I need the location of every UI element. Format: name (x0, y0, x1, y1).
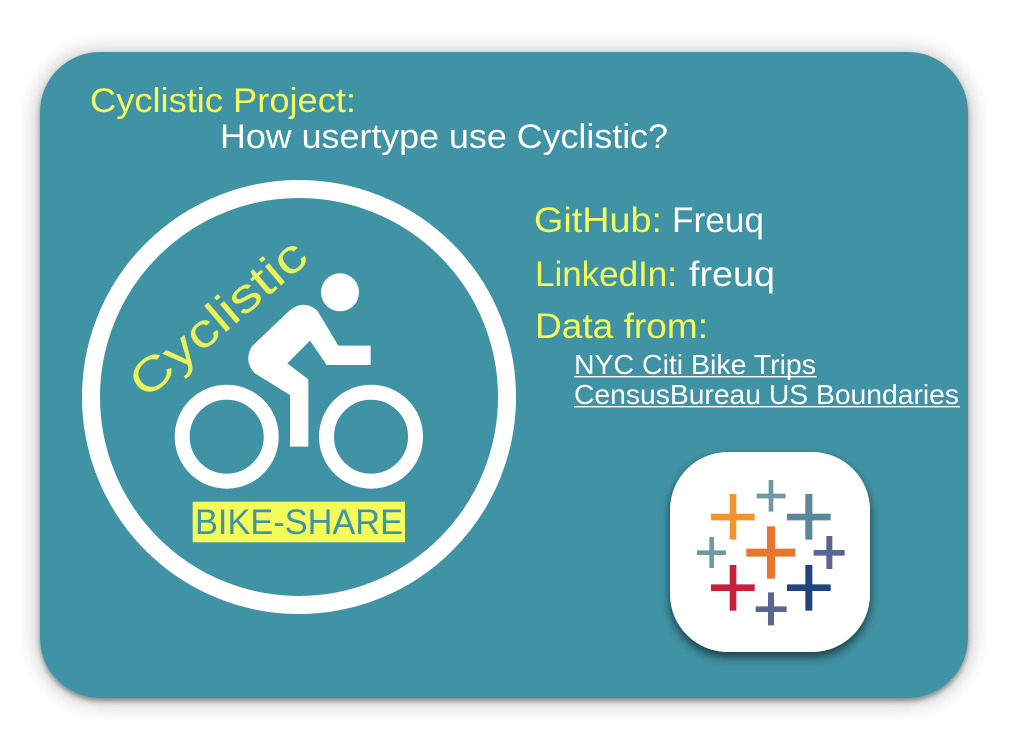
logo: Cyclistic bike-share (82, 180, 516, 614)
GitHub line: Freuq (672, 201, 764, 240)
heading: Cyclistic Project: Cyclistic Project: (90, 82, 356, 120)
title (90, 82, 668, 156)
LinkedIn line (535, 255, 775, 294)
logo wordmark: Cyclistic: Cyclistic (133, 246, 306, 392)
GitHub line (534, 201, 764, 240)
subtitle: How usertype use Cyclistic: How usertype use Cyclistic? (220, 118, 668, 156)
icon: cyclist (182, 273, 416, 481)
data source: NYC Citi Bike Trips: NYC Citi Bike Trips (574, 349, 816, 380)
LinkedIn line: freuq (689, 255, 775, 294)
GitHub line: GitHub: (534, 201, 662, 240)
text block: links and data sources (534, 201, 960, 410)
Data from heading: Data from: (535, 307, 708, 346)
logo ring (91, 189, 507, 605)
data source: CensusBureau US Boundaries: CensusBureau US Boundaries (574, 379, 959, 410)
icon: Tableau logo (670, 452, 870, 652)
logo badge: BIKE-SHARE: BIKE-SHARE (195, 503, 403, 542)
LinkedIn line: LinkedIn: (535, 255, 677, 294)
